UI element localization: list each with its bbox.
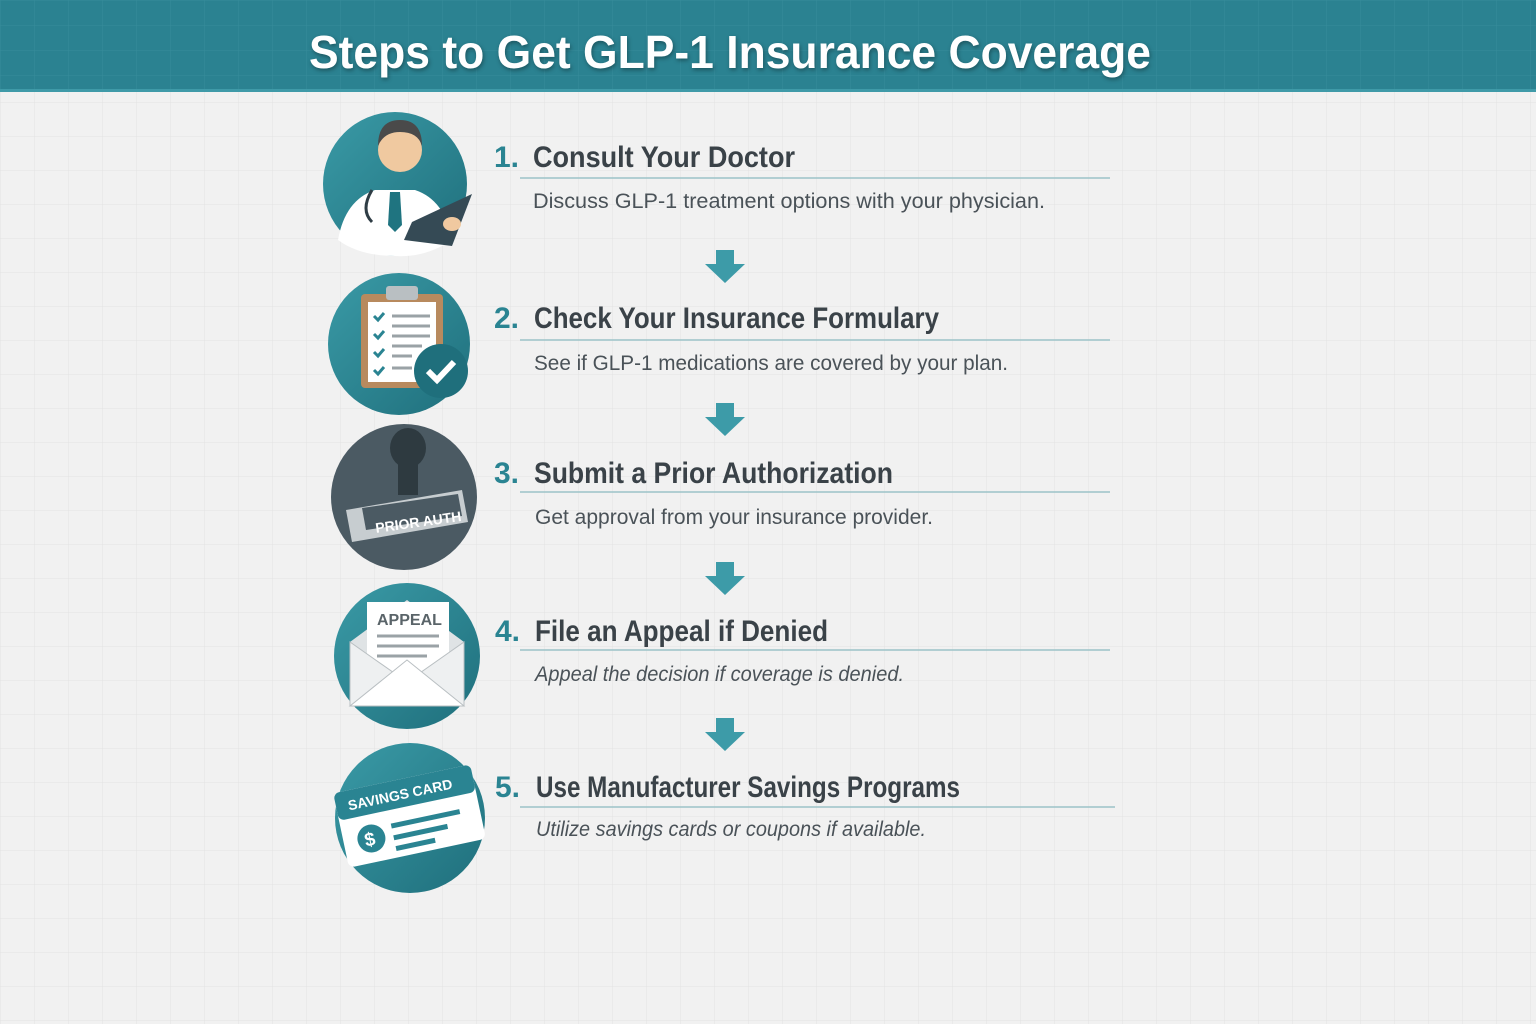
title: Steps to Get GLP-1 Insurance Coverage xyxy=(309,26,1151,78)
heading 1: Consult Your Doctor xyxy=(533,141,795,174)
heading 5: 5. xyxy=(495,771,520,804)
icon: appeal envelope: APPEAL xyxy=(377,612,442,629)
step 1 xyxy=(323,112,1110,256)
icon: clipboard checklist xyxy=(328,273,470,415)
step 4 xyxy=(334,583,1110,729)
desc 3: Get approval from your insurance provider. xyxy=(535,506,933,529)
heading 3: Submit a Prior Authorization xyxy=(534,457,893,490)
heading 4: File an Appeal if Denied xyxy=(535,615,828,648)
heading 1: 1. xyxy=(494,141,519,174)
arrow 3 xyxy=(705,562,745,595)
arrow 4 xyxy=(705,718,745,751)
desc 2: See if GLP-1 medications are covered by your plan. xyxy=(534,352,1008,375)
desc 1: Discuss GLP-1 treatment options with your physician. xyxy=(533,190,1045,213)
icon: savings card: SAVINGS CARD xyxy=(346,776,454,813)
icon: savings card xyxy=(333,743,486,893)
heading 5: Use Manufacturer Savings Programs xyxy=(536,771,960,804)
icon: savings card: $ xyxy=(363,829,378,852)
heading 4: 4. xyxy=(495,615,520,648)
desc 5: Utilize savings cards or coupons if available. xyxy=(536,818,926,841)
desc 4: Appeal the decision if coverage is denied. xyxy=(533,663,904,686)
heading 3: 3. xyxy=(494,457,519,490)
step 2 xyxy=(328,273,1110,415)
arrow 1 xyxy=(705,250,745,283)
step 5 xyxy=(333,743,1115,893)
arrow 2 xyxy=(705,403,745,436)
heading 2: Check Your Insurance Formulary xyxy=(534,302,939,335)
icon: prior auth stamp: PRIOR AUTH xyxy=(374,508,462,536)
icon: doctor xyxy=(323,112,472,256)
icon: appeal envelope xyxy=(334,583,480,729)
icon: prior auth stamp xyxy=(331,424,477,570)
heading 2: 2. xyxy=(494,302,519,335)
header banner xyxy=(0,0,1536,92)
step 3 xyxy=(331,424,1110,570)
